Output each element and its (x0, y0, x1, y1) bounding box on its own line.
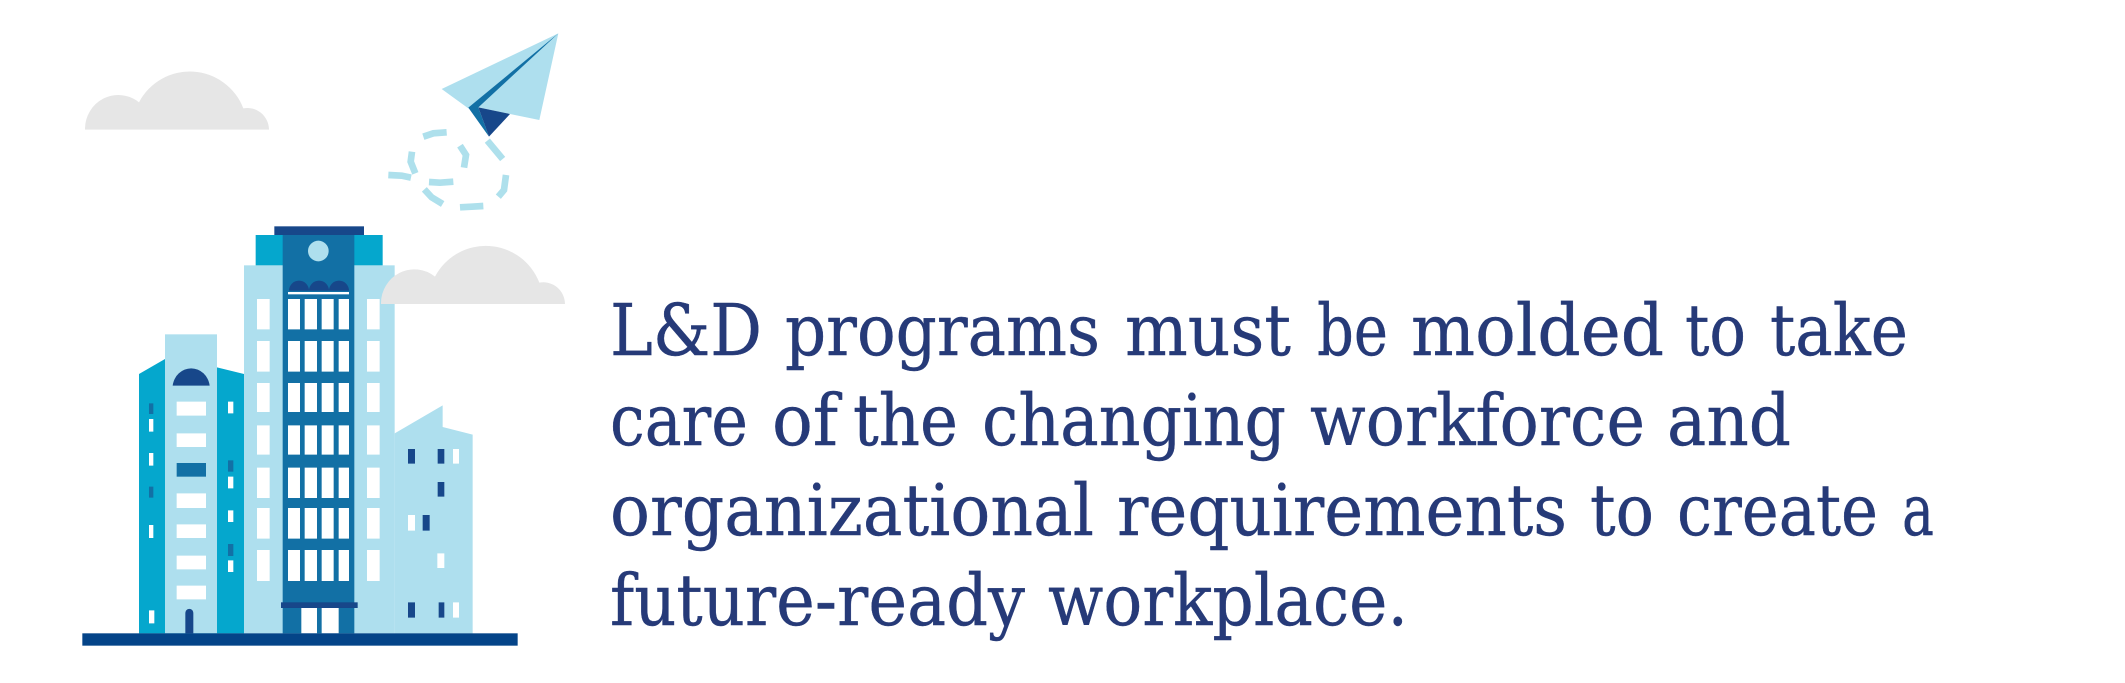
icon: left cloud (85, 72, 269, 130)
text block: main statement: future-ready (610, 559, 1025, 642)
text block: main statement: molded (1411, 289, 1664, 372)
text block: main statement: programs (785, 289, 1100, 372)
text block: main statement: take (1770, 289, 1908, 372)
text block: main statement: the (853, 379, 958, 462)
dashed flight path (388, 132, 506, 207)
text block: main statement: workforce (1310, 379, 1645, 462)
ground bar (82, 633, 518, 646)
text block: main statement: must (1125, 289, 1291, 372)
text block: main statement: organizational (610, 469, 1094, 552)
tall central tower (244, 226, 395, 633)
icon: right cloud (381, 246, 565, 304)
text block: main statement: to (1590, 469, 1654, 552)
text block: main statement: workplace. (1048, 559, 1408, 642)
text block: main statement: and (1667, 379, 1791, 462)
text block: main statement: create (1677, 469, 1878, 552)
text block: main statement: L&D (610, 289, 762, 372)
text block: main statement: requirements (1117, 469, 1567, 552)
text block: main statement (610, 289, 1934, 642)
text block: main statement: changing (982, 379, 1286, 462)
text block: main statement: to (1685, 289, 1746, 372)
left teal building (139, 359, 244, 633)
text block: main statement: a (1902, 469, 1934, 552)
text block: main statement: be (1317, 289, 1388, 372)
illustration: city buildings (82, 226, 565, 646)
text block: main statement: care (610, 379, 748, 462)
right light building (395, 405, 473, 633)
icon: paper plane (442, 33, 558, 137)
text block: main statement: of (772, 379, 843, 462)
left light tower (165, 334, 217, 633)
